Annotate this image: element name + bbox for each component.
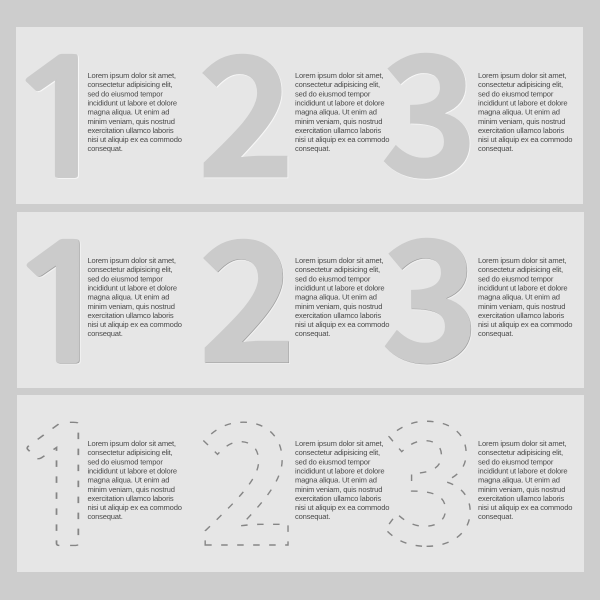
text block 3: minim veniam, quis nostrud: [478, 302, 565, 311]
text block 3: nisi ut aliquip ex ea commodo: [478, 135, 572, 144]
text block 2: Lorem ipsum dolor sit amet,: [295, 71, 383, 80]
text block 2: sed do eiusmod tempor: [295, 457, 371, 466]
text block 3: sed do eiusmod tempor: [478, 89, 554, 98]
text block 2: magna aliqua. Ut enim ad: [295, 108, 377, 117]
text block 2: minim veniam, quis nostrud: [295, 485, 382, 494]
text block 1: magna aliqua. Ut enim ad: [88, 293, 169, 302]
text block 1: exercitation ullamco laboris: [88, 126, 174, 135]
text block 3: Lorem ipsum dolor sit amet,: [478, 71, 566, 80]
text block 1: incididunt ut labore et dolore: [88, 98, 177, 107]
text block 1: minim veniam, quis nostrud: [88, 302, 175, 311]
text block 3: Lorem ipsum dolor sit amet,: [478, 439, 566, 448]
text block 3: consectetur adipisicing elit,: [478, 265, 563, 274]
text block 3: incididunt ut labore et dolore: [478, 283, 567, 292]
text block 1: exercitation ullamco laboris: [88, 311, 174, 320]
panel 2 background: [17, 212, 584, 388]
text block 1: consequat.: [88, 329, 123, 338]
panel 1 background: [16, 27, 583, 204]
text block 3: sed do eiusmod tempor: [478, 274, 554, 283]
text block 3: nisi ut aliquip ex ea commodo: [478, 320, 572, 329]
text block 2: consequat.: [295, 144, 330, 153]
text block 2: consectetur adipisicing elit,: [295, 265, 380, 274]
text block 2: incididunt ut labore et dolore: [295, 98, 384, 107]
text block 3: consequat.: [478, 144, 513, 153]
text block 1: sed do eiusmod tempor: [88, 457, 163, 466]
text block 1: sed do eiusmod tempor: [88, 89, 163, 98]
text block 1: nisi ut aliquip ex ea commodo: [88, 320, 182, 329]
numeral 3: 3: [381, 351, 480, 593]
text block 3: incididunt ut labore et dolore: [478, 98, 567, 107]
text block 3: magna aliqua. Ut enim ad: [478, 108, 560, 117]
text block 2: nisi ut aliquip ex ea commodo: [295, 503, 389, 512]
text block 2: minim veniam, quis nostrud: [295, 117, 382, 126]
numeral 2: 2: [198, 169, 297, 411]
text block 2: exercitation ullamco laboris: [295, 126, 381, 135]
text block 3: consequat.: [478, 329, 513, 338]
text block 2: consectetur adipisicing elit,: [295, 448, 380, 457]
text block 2: exercitation ullamco laboris: [295, 311, 381, 320]
text block 3: minim veniam, quis nostrud: [478, 485, 565, 494]
text block 3: consequat.: [478, 512, 513, 521]
text block 3: sed do eiusmod tempor: [478, 457, 554, 466]
text block 2: nisi ut aliquip ex ea commodo: [295, 135, 389, 144]
text block 2: exercitation ullamco laboris: [295, 494, 381, 503]
text block 2: consequat.: [295, 512, 330, 521]
text block 2: magna aliqua. Ut enim ad: [295, 476, 377, 485]
text block 1: nisi ut aliquip ex ea commodo: [88, 503, 182, 512]
text block 1: consectetur adipisicing elit,: [88, 265, 173, 274]
text block 1: incididunt ut labore et dolore: [88, 283, 177, 292]
text block 1: Lorem ipsum dolor sit amet,: [88, 71, 176, 80]
text block 2: magna aliqua. Ut enim ad: [295, 293, 377, 302]
text block 1: Lorem ipsum dolor sit amet,: [88, 256, 176, 265]
text block 2: sed do eiusmod tempor: [295, 274, 371, 283]
text block 1: Lorem ipsum dolor sit amet,: [88, 439, 176, 448]
text block 3: magna aliqua. Ut enim ad: [478, 293, 560, 302]
numeral 3: 3: [381, 168, 480, 410]
numeral 1: 1: [1, 410, 125, 570]
text block 2: Lorem ipsum dolor sit amet,: [295, 256, 383, 265]
text block 1: sed do eiusmod tempor: [88, 274, 163, 283]
text block 1: consectetur adipisicing elit,: [88, 80, 173, 89]
text block 2: nisi ut aliquip ex ea commodo: [295, 320, 389, 329]
text block 1: incididunt ut labore et dolore: [88, 466, 177, 475]
text block 3: consectetur adipisicing elit,: [478, 80, 563, 89]
text block 1: minim veniam, quis nostrud: [88, 485, 175, 494]
text block 1: exercitation ullamco laboris: [88, 494, 174, 503]
text block 1: nisi ut aliquip ex ea commodo: [88, 135, 182, 144]
text block 3: magna aliqua. Ut enim ad: [478, 476, 560, 485]
numeral 1: 1: [1, 227, 125, 387]
text block 3: exercitation ullamco laboris: [478, 494, 564, 503]
text block 1: magna aliqua. Ut enim ad: [88, 108, 169, 117]
text block 1: minim veniam, quis nostrud: [88, 117, 175, 126]
text block 2: Lorem ipsum dolor sit amet,: [295, 439, 383, 448]
text block 2: incididunt ut labore et dolore: [295, 283, 384, 292]
text block 2: incididunt ut labore et dolore: [295, 466, 384, 475]
text block 1: consequat.: [88, 512, 123, 521]
text block 1: consequat.: [88, 144, 123, 153]
text block 1: magna aliqua. Ut enim ad: [88, 476, 169, 485]
text block 3: exercitation ullamco laboris: [478, 126, 564, 135]
panel: dashed outline numbers: [1, 351, 584, 594]
text block 2: consectetur adipisicing elit,: [295, 80, 380, 89]
text block 3: nisi ut aliquip ex ea commodo: [478, 503, 572, 512]
panel 3 background: [17, 395, 584, 572]
numeral 2: 2: [198, 352, 297, 594]
numeral 1: 1: [0, 42, 124, 202]
text block 2: minim veniam, quis nostrud: [295, 302, 382, 311]
text block 3: exercitation ullamco laboris: [478, 311, 564, 320]
panel: filled numbers with shadow: [1, 168, 584, 411]
text block 3: consectetur adipisicing elit,: [478, 448, 563, 457]
text block 3: Lorem ipsum dolor sit amet,: [478, 256, 566, 265]
text block 2: sed do eiusmod tempor: [295, 89, 371, 98]
text block 2: consequat.: [295, 329, 330, 338]
text block 1: consectetur adipisicing elit,: [88, 448, 173, 457]
panel: filled numbers with highlight: [0, 0, 583, 226]
text block 3: minim veniam, quis nostrud: [478, 117, 565, 126]
text block 3: incididunt ut labore et dolore: [478, 466, 567, 475]
